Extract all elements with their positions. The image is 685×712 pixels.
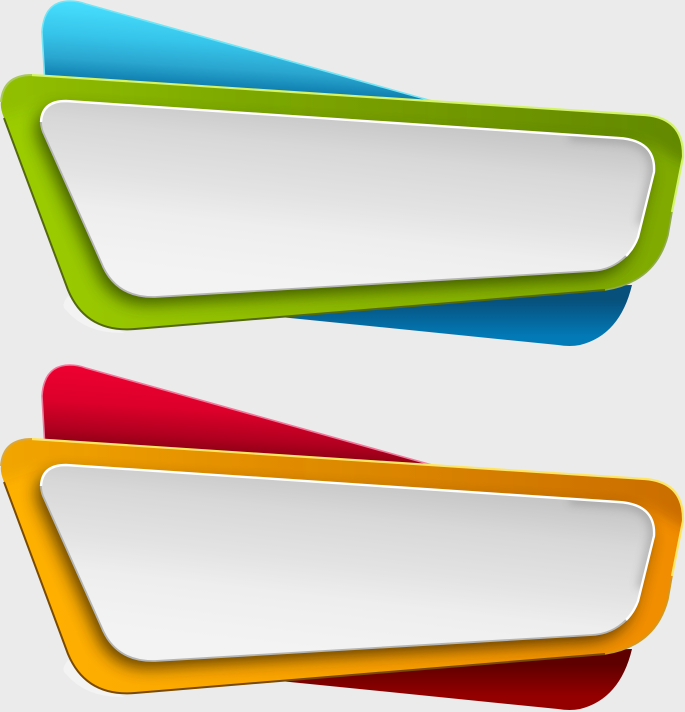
ground glow bbox=[63, 296, 125, 333]
back tab: red bottom bbox=[280, 649, 632, 710]
banner: blue and green bbox=[0, 1, 685, 346]
frame: green bbox=[0, 55, 685, 329]
back tab: red top bbox=[42, 365, 432, 465]
frame: orange bbox=[0, 419, 685, 693]
back tab: blue bottom bbox=[280, 285, 632, 346]
panel: blank white label bbox=[41, 101, 654, 297]
banner: red and orange bbox=[0, 365, 685, 710]
panel: blank white label bbox=[41, 465, 654, 661]
back tab: blue top bbox=[42, 1, 432, 101]
ground glow bbox=[63, 660, 125, 697]
